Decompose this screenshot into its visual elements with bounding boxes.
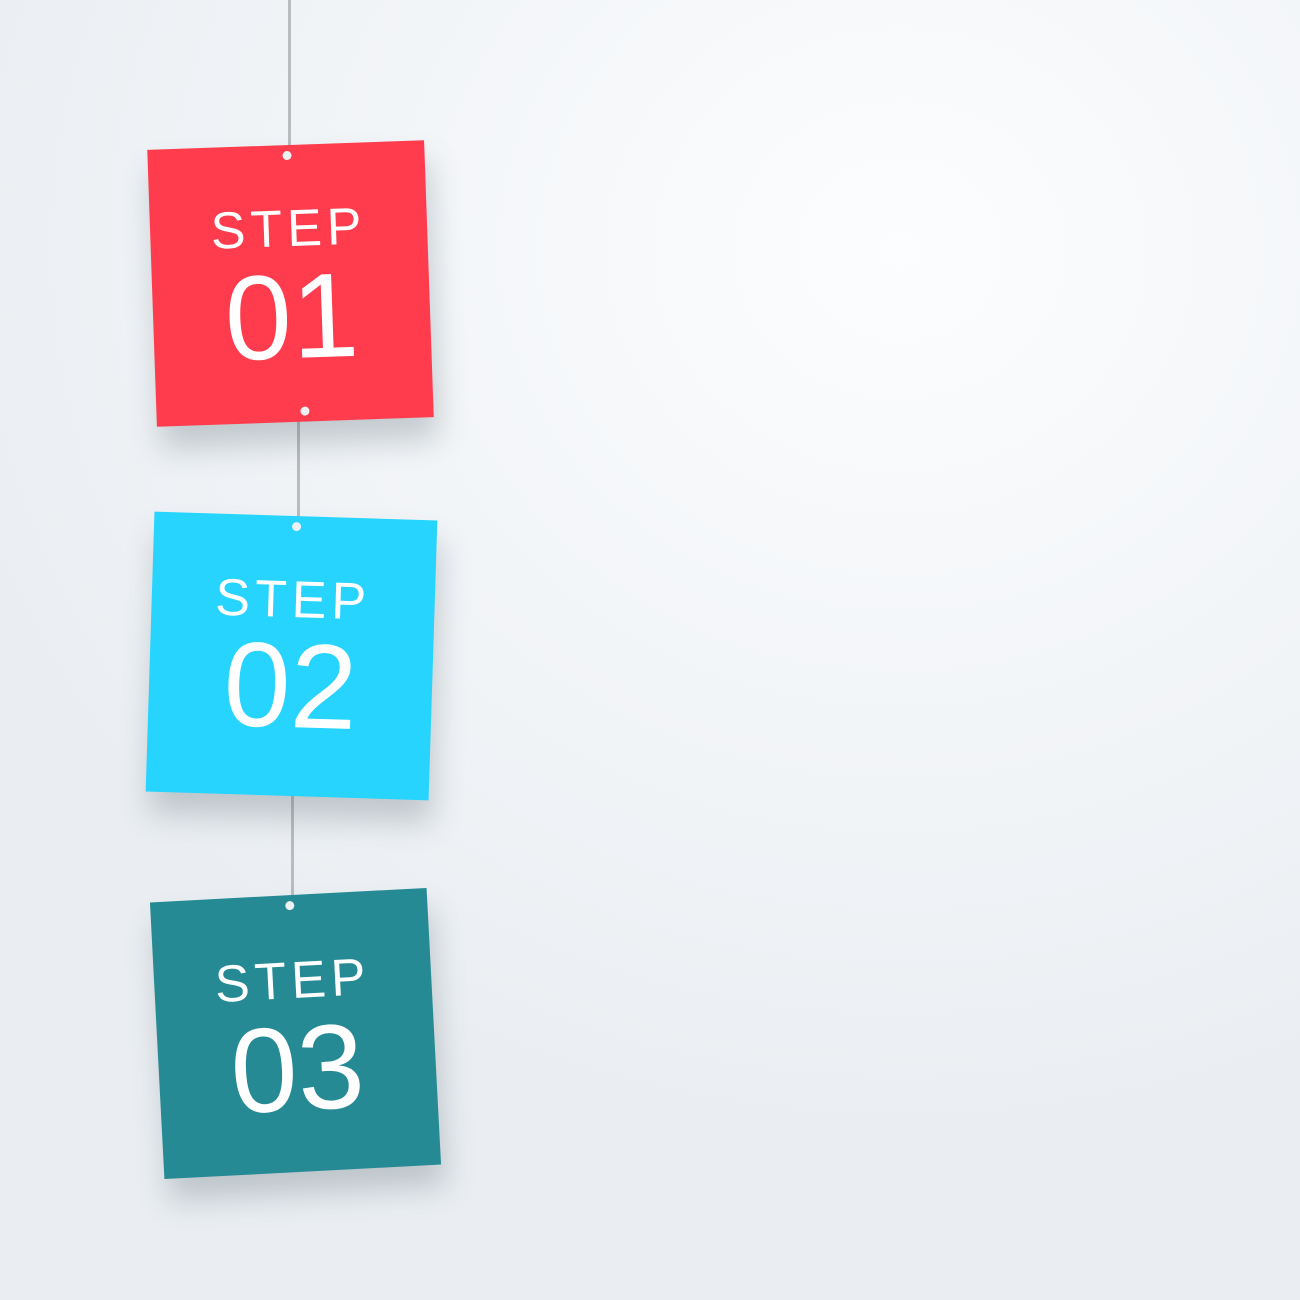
number: 03: 03 [227,999,368,1139]
number: 02: 02 [222,617,359,755]
label: STEP: STEP [214,569,372,631]
label: STEP: STEP [213,948,372,1014]
string: between 2 and 3 [291,785,294,905]
string: between 1 and 2 [297,410,300,530]
string: top [288,0,291,160]
card: step 03 [150,888,441,1179]
label: STEP: STEP [210,197,367,261]
number: 01: 01 [223,248,361,386]
card: step 02 [146,512,437,800]
card: step 01 [147,140,434,427]
